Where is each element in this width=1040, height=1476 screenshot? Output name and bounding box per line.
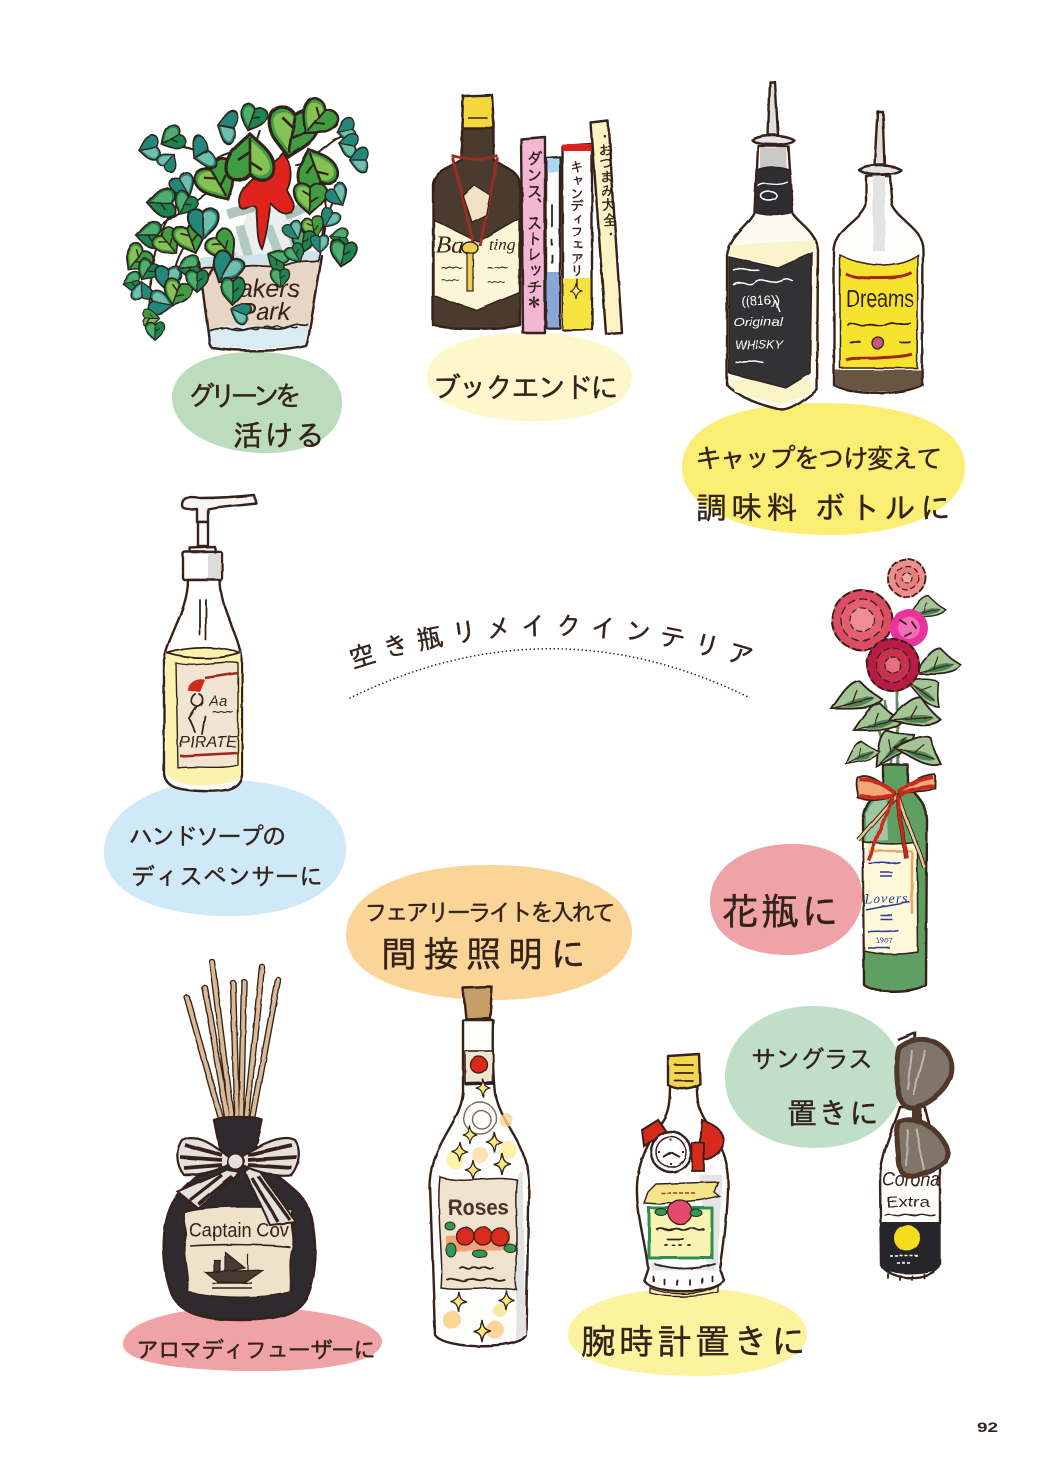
illustration: sunglasses on bottle	[880, 1033, 952, 1280]
bottle 2	[834, 112, 923, 393]
ribbon	[857, 774, 935, 868]
illustration: fairy light bottle: Roses	[448, 1195, 509, 1220]
illustration: pump bottle: Aa	[208, 693, 227, 710]
reeds	[187, 962, 278, 1122]
red wax	[239, 153, 294, 249]
books: キャンディフェアリー	[570, 160, 584, 290]
illustration: flower vase	[831, 558, 961, 992]
bottle	[433, 95, 520, 329]
illustration: plant in bottle: Park	[239, 298, 292, 326]
caption: seasoning: キャップをつけ変えて	[695, 444, 943, 474]
bow	[177, 1138, 299, 1225]
books: ダンス、ストレッチ＊	[524, 150, 542, 310]
books: ・おつまみ大全・	[596, 128, 619, 240]
speech blob: sunglasses	[725, 1006, 903, 1148]
illustration: watch bottle	[637, 1054, 728, 1297]
books	[521, 121, 622, 334]
label	[644, 1182, 719, 1258]
sunglasses	[897, 1033, 952, 1176]
illustration: reed diffuser: Captain Cov	[189, 1220, 289, 1242]
speech blob: bookend	[427, 333, 632, 421]
illustration: sunglasses on bottle: Extra	[886, 1194, 931, 1211]
speech blob: aroma diffuser	[123, 1307, 382, 1371]
caption: dispenser: ディスペンサーに	[131, 864, 323, 891]
bottle	[164, 1117, 316, 1320]
caption: seasoning: 調味料 ボトルに	[696, 491, 951, 526]
caption: dispenser	[129, 824, 323, 891]
caption: fairy light: フェアリーライトを入れて	[364, 900, 616, 927]
caption: sunglasses: サングラス	[751, 1046, 873, 1074]
bottle	[863, 765, 927, 992]
speech blob: fairy light	[346, 865, 632, 1000]
caption: green plant: 活ける	[233, 420, 325, 453]
label	[184, 1206, 293, 1297]
bottle 1	[727, 82, 818, 410]
bottle: Ba	[436, 232, 464, 259]
bottle 1: Original	[733, 315, 783, 329]
caption: sunglasses	[751, 1046, 879, 1131]
illustration: seasoning bottles	[727, 82, 923, 410]
illustration: plant in bottle	[118, 95, 368, 351]
caption: vase: 花瓶に	[721, 892, 839, 934]
illustration: fairy light bottle	[430, 987, 529, 1346]
bottle: ting	[489, 235, 515, 254]
main label	[439, 1177, 517, 1290]
speech blob: dispenser	[104, 780, 346, 916]
title	[349, 614, 753, 699]
illustration: sunglasses on bottle: Corona	[882, 1169, 940, 1191]
caption: dispenser: ハンドソープの	[129, 824, 286, 851]
caption: aroma diffuser: アロマディフューザーに	[136, 1337, 376, 1363]
speech blob: watch	[568, 1288, 807, 1376]
illustration: plant in bottle: akers	[239, 275, 300, 303]
illustration: flower vase: Lovers	[863, 892, 909, 907]
bottle 1: WHISKY	[735, 338, 784, 352]
caption: fairy light: 間接照明に	[381, 934, 586, 975]
caption: green plant	[187, 381, 325, 453]
page number: 92	[977, 1419, 998, 1435]
speech blob: green plant	[172, 352, 342, 453]
illustration: flower vase: 1907	[876, 936, 893, 945]
title: 空き瓶リメイクインテリア	[349, 614, 753, 670]
speech blob: seasoning	[682, 403, 965, 535]
speech blob: vase	[710, 844, 862, 955]
bottle 1: ((816))	[741, 293, 780, 308]
label	[863, 842, 918, 954]
flowers and leaves	[831, 558, 961, 780]
neck label	[465, 1051, 493, 1084]
illustration: pump bottle: PIRATE	[179, 734, 237, 751]
caption: bookend: ブックエンドに	[432, 373, 619, 405]
caption: watch: 腕時計置きに	[581, 1323, 806, 1362]
caption: sunglasses: 置きに	[787, 1098, 879, 1131]
caption: fairy light	[364, 900, 616, 975]
illustration: pump bottle	[164, 495, 256, 791]
illustration: bookend bottle and books	[433, 95, 622, 334]
illustration: reed diffuser	[164, 962, 316, 1320]
bottle	[880, 1107, 940, 1278]
lights	[443, 1079, 517, 1342]
caption: green plant: グリーンを	[187, 381, 302, 412]
caption: seasoning	[695, 444, 951, 526]
bottle 2: Dreams	[846, 285, 914, 313]
watch	[642, 1120, 724, 1172]
